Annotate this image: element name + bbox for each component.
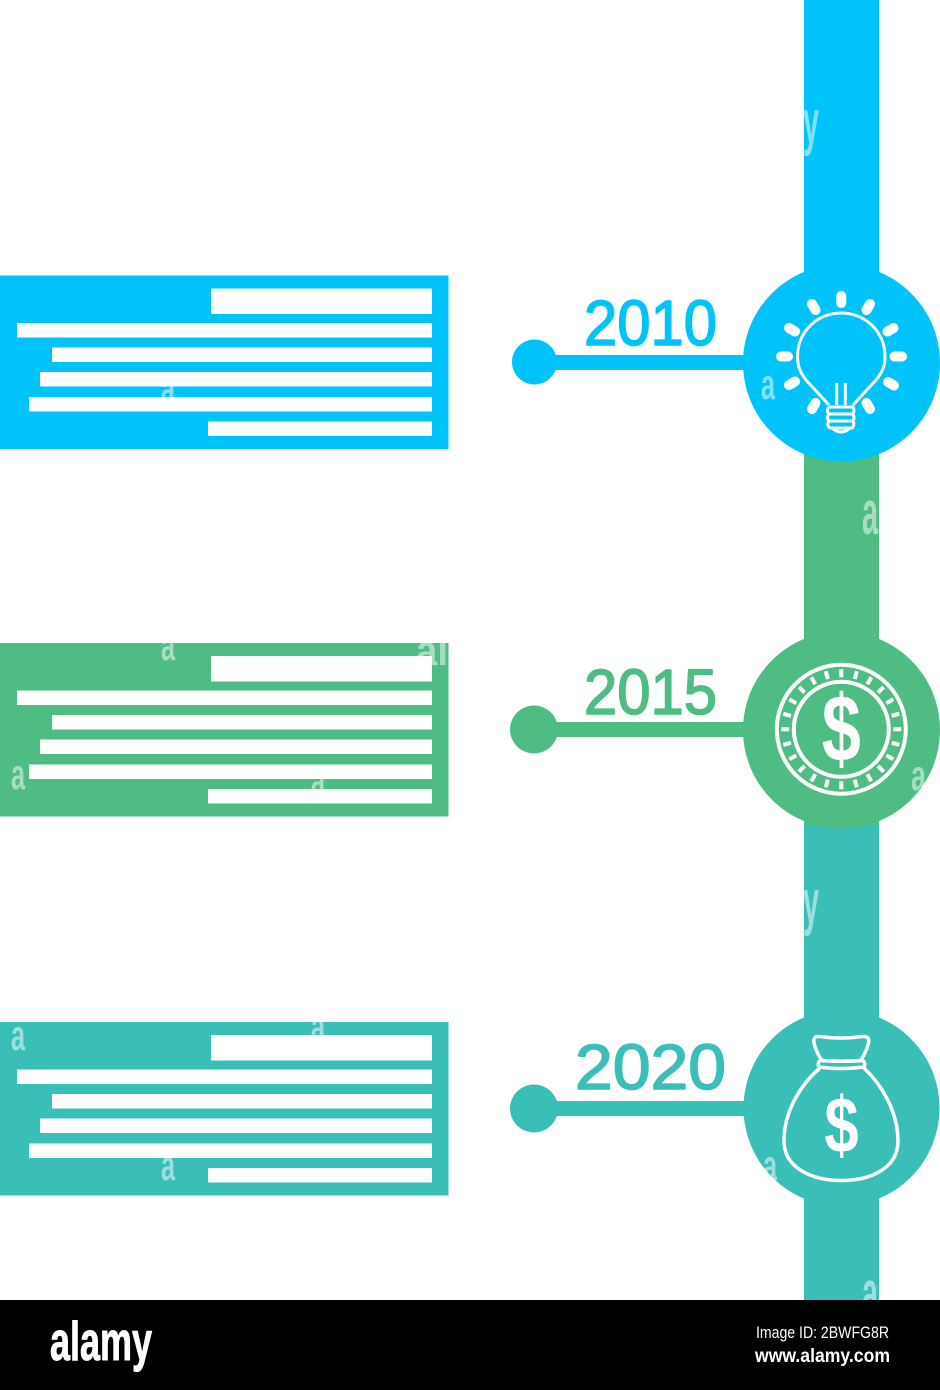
connector: 2020 (510, 1084, 750, 1132)
panel: 2020 text block: a (11, 1012, 26, 1060)
panel: 2015 text block: a (311, 757, 326, 805)
icon: coin (777, 665, 906, 794)
panel: 2010 text block (0, 276, 448, 449)
panel: 2020 text block: a (161, 1142, 176, 1190)
vertical timeline spine (804, 0, 879, 1300)
panel: 2015 text block: a (11, 751, 26, 799)
watermark fragments (761, 88, 927, 1328)
circle node: 2015 (743, 632, 940, 828)
website: www.alamy.com (754, 1346, 890, 1367)
year label: 2020: 2020 (575, 1031, 726, 1103)
watermark fragments: a (763, 1142, 778, 1190)
circle node: 2010 (743, 264, 940, 462)
watermark fragments: y (803, 88, 819, 157)
icon: money bag (784, 1036, 898, 1180)
watermark fragments: y (803, 868, 819, 937)
icon: coin: $ (822, 675, 861, 781)
watermark fragments: a (911, 752, 927, 800)
panel: 2015 text block: a (161, 622, 176, 670)
footer bar (0, 1300, 940, 1390)
watermark fragments: a (761, 361, 776, 409)
image id: Image ID: 2BWFG8R (756, 1323, 889, 1342)
panel: 2010 text block: a (161, 365, 176, 413)
panel: 2020 text block: a (311, 1003, 326, 1051)
icon: money bag: $ (824, 1082, 859, 1170)
connector: 2010 (512, 340, 750, 384)
year label: 2010: 2010 (584, 287, 717, 359)
logo: alamy: alamy (50, 1310, 152, 1372)
watermark fragments: a (862, 1259, 878, 1328)
watermark fragments: a (862, 479, 878, 548)
year label: 2015: 2015 (584, 656, 717, 728)
panel: 2015 text block: al (416, 627, 448, 675)
circle node: 2020 (744, 1010, 940, 1206)
panel: 2015 text block (0, 622, 448, 816)
panel: 2020 text block (0, 1003, 448, 1196)
connector: 2015 (510, 706, 750, 754)
icon: light bulb (781, 296, 902, 432)
